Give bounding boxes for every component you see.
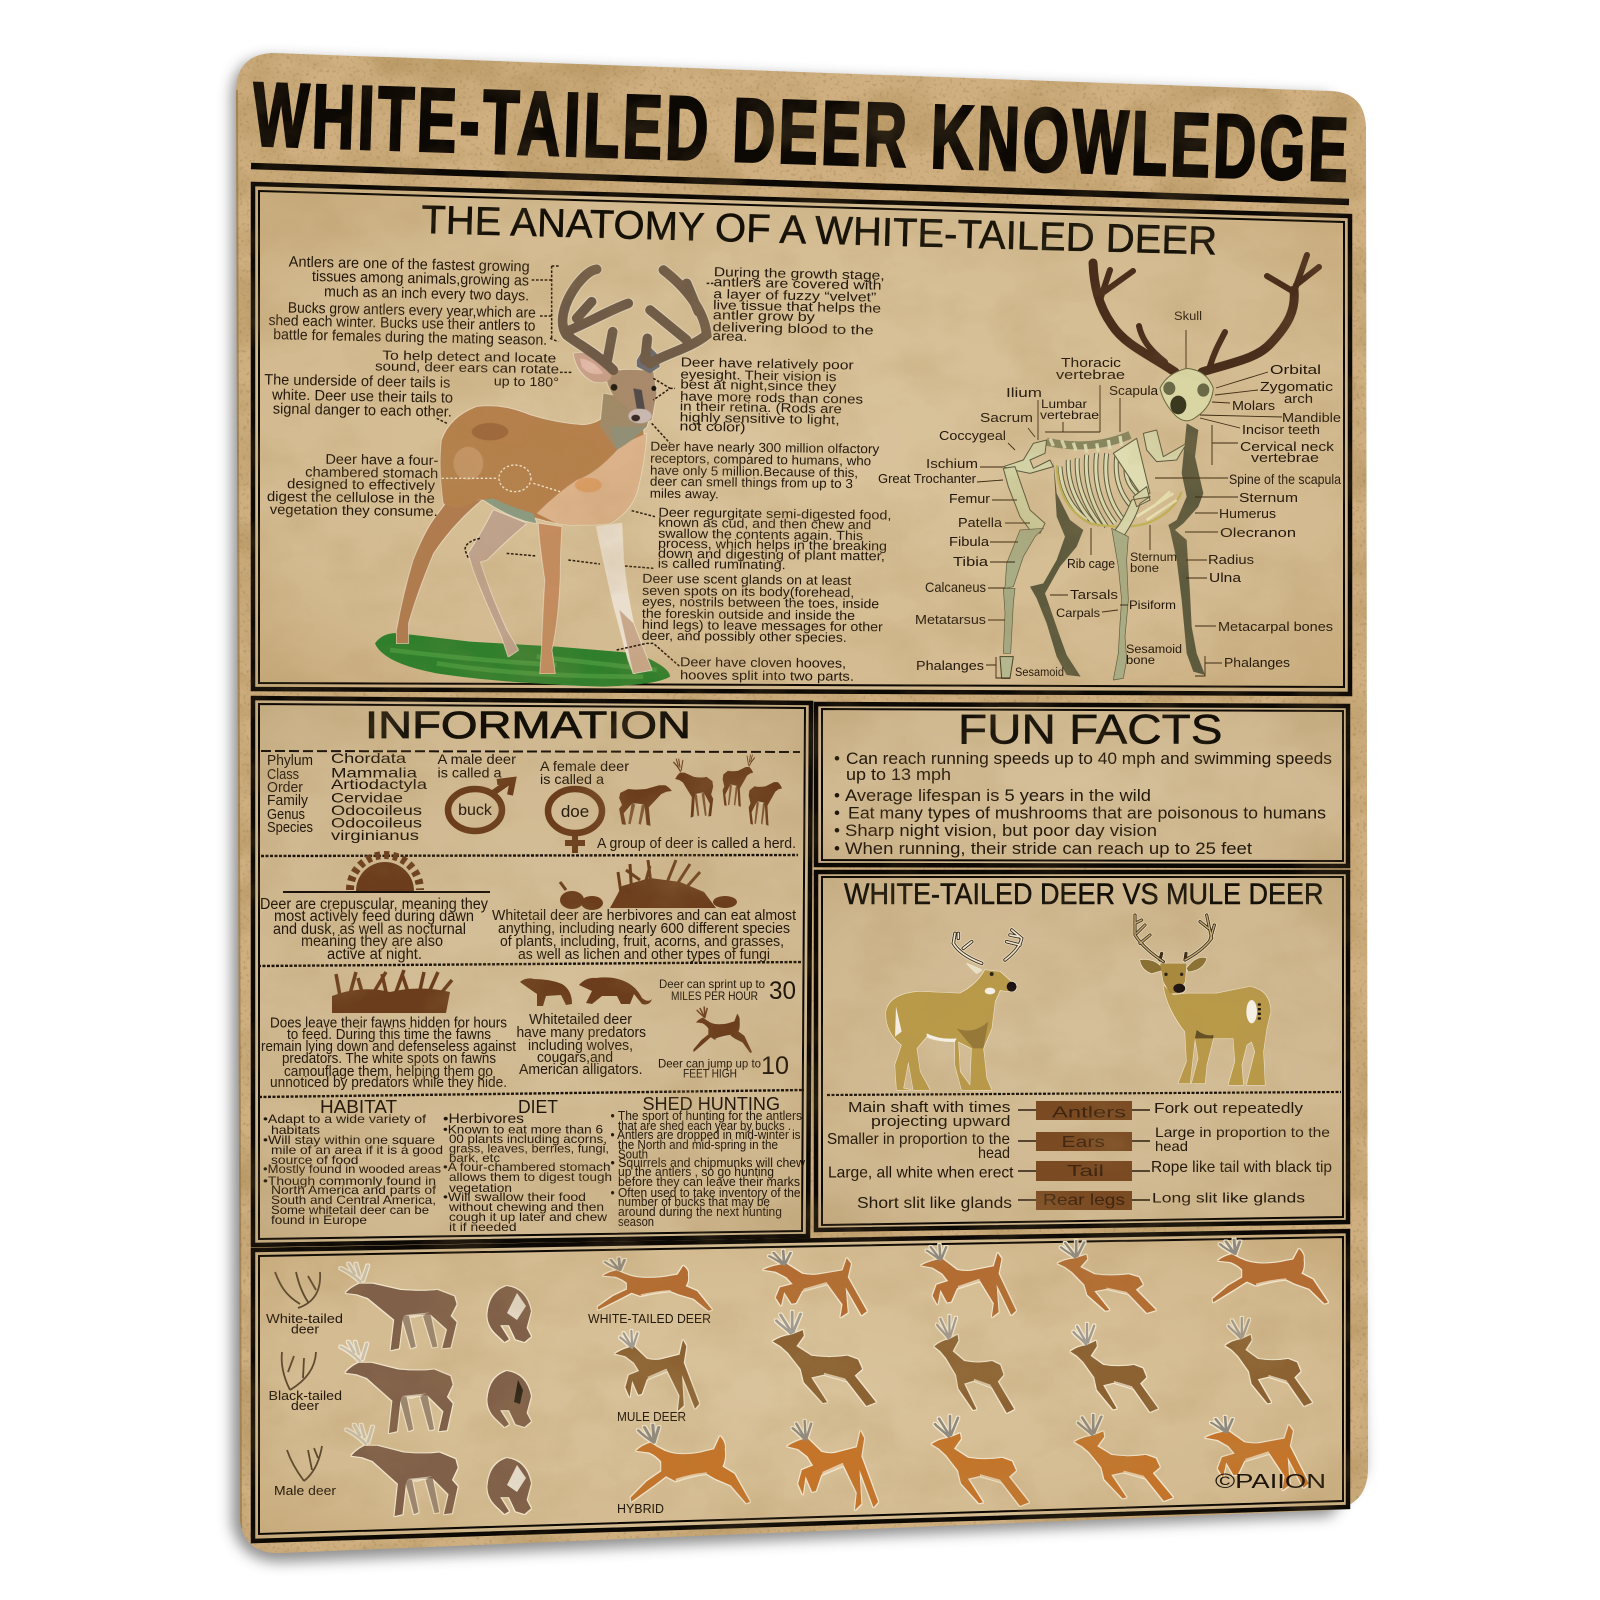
taxonomy ranks: Genus [267, 807, 305, 823]
column: habitat: mile of an area if it is a good [271, 1143, 443, 1157]
comparison: left column: Main shaft with times [848, 1099, 1010, 1116]
dividers [261, 751, 800, 752]
skeleton labels: Mandible [1282, 410, 1341, 425]
taxonomy values: Chordata [331, 750, 406, 766]
text: olfactory: receptors, compared to humans, who [650, 451, 871, 468]
text: ruminating: swallow the contents again. This [658, 526, 864, 543]
column: habitat: HABITAT [320, 1097, 397, 1117]
skeleton labels: Calcaneus [925, 579, 986, 595]
comparison: left column [827, 1099, 1014, 1212]
stat: jump height: FEET HIGH [683, 1066, 737, 1080]
fun facts list: Can reach running speeds up to 40 mph and swimming speeds [846, 749, 1332, 768]
text: scent glands: hind legs) to leave messages for other [642, 617, 884, 634]
illustration: mule deer [1135, 915, 1271, 1085]
text: ears rotate: sound, deer ears can rotate [375, 358, 559, 377]
label: white-tailed: deer [291, 1322, 320, 1336]
text: olfactory: deer can smell things from up to 3 [650, 474, 853, 491]
skeleton labels: Sacrum [980, 410, 1033, 425]
text: eyesight: have more rods than cones [680, 388, 864, 407]
text: herbivores: of plants, including, fruit, acorns, and grasses, [500, 933, 784, 950]
text: ears rotate [375, 347, 559, 390]
text: fawns: unnoticed by predators while they hide. [270, 1075, 507, 1091]
female deer [540, 758, 629, 853]
column: diet: grass, leaves, berries, fungi, [449, 1142, 609, 1156]
comparison: right column: Large in proportion to the [1155, 1124, 1330, 1140]
column: diet [443, 1097, 612, 1234]
comparison: right column: head [1155, 1138, 1188, 1154]
text: stomach: designed to effectively [287, 475, 435, 493]
leader lines: skeleton [977, 330, 1282, 678]
stat: jump height: Deer can jump up to [658, 1056, 761, 1070]
divider [827, 1092, 1341, 1095]
stat: sprint speed: MILES PER HOUR [671, 989, 758, 1003]
text: stomach: chambered stomach [305, 463, 438, 481]
skeleton labels: Ilium [1006, 385, 1042, 400]
taxonomy ranks: Order [267, 780, 303, 796]
text: tail signal [264, 371, 453, 421]
text: velvet: antler grow by [713, 307, 816, 324]
column: diet: •Will swallow their food [443, 1190, 586, 1204]
text: ruminating: known as cud, and then chew and [658, 515, 871, 532]
taxonomy ranks: Class [267, 767, 299, 783]
fun facts list: Eat many types of mushrooms that are poisonous to humans [848, 804, 1326, 822]
column: diet: •Known to eat more than 6 [443, 1122, 603, 1136]
column: habitat: source of food [271, 1153, 358, 1167]
skeleton labels: Pisiform [1129, 598, 1176, 612]
skeleton labels: vertebrae [1251, 450, 1319, 465]
skeleton labels: vertebrae [1040, 408, 1099, 422]
text: eyesight: best at night,since they [680, 376, 837, 394]
row: hybrid deer [631, 1415, 1309, 1510]
text: hooves [680, 654, 854, 684]
text: antlers fastest growing: battle for females during the mating season. [273, 326, 547, 349]
text: herbivores: Whitetail deer are herbivores and can eat almost [492, 907, 797, 924]
taxonomy ranks: Family [267, 793, 309, 809]
skeleton labels: Coccygeal [939, 428, 1006, 443]
icon: wolf and cougar [520, 977, 652, 1006]
taxonomy values: Artiodactyla [331, 776, 427, 792]
comparison: right column: Long slit like glands [1152, 1190, 1305, 1206]
text: scent glands: eyes, nostrils between the toes, inside [642, 594, 879, 611]
heading: vs: WHITE-TAILED DEER VS MULE DEER [844, 878, 1324, 911]
skeleton labels [878, 311, 1341, 679]
male deer: is called a [438, 764, 502, 780]
title rule [251, 166, 1349, 202]
text: stomach [267, 450, 439, 519]
skeleton labels: Sternum [1130, 552, 1177, 564]
text: crepuscular: Deer are crepuscular, meaning they [260, 896, 488, 913]
fun facts list: • [834, 804, 840, 822]
column: diet: DIET [518, 1097, 558, 1117]
rump column [487, 1286, 531, 1514]
column: habitat: found in Europe [271, 1213, 367, 1227]
comparison: connector lines [1018, 1110, 1150, 1200]
label: white-tailed row: WHITE-TAILED DEER [588, 1311, 711, 1326]
column: diet: •Herbivores [443, 1110, 524, 1126]
taxonomy values: Cervidae [331, 790, 403, 806]
text: olfactory [650, 439, 880, 503]
column: shed hunting: • The sport of hunting for the antlers [610, 1109, 802, 1123]
text: ears rotate: To help detect and locate [382, 347, 556, 366]
icon: sunrise [283, 855, 490, 892]
skeleton labels: Sesamoid [1015, 667, 1064, 679]
icon: plants and fruit [560, 860, 737, 910]
comparison: right column: Fork out repeatedly [1154, 1100, 1304, 1117]
text: fawns [261, 1016, 516, 1091]
skeleton labels: Orbital [1270, 362, 1321, 377]
text: ruminating [658, 505, 891, 573]
skeleton labels: arch [1284, 391, 1313, 406]
text: fawns: camouflage them, helping them go [284, 1064, 493, 1080]
text: fawns: Does leave their fawns hidden for hours [270, 1016, 507, 1032]
text: velvet: delivering blood to the [712, 319, 874, 338]
text: antlers fastest growing: tissues among animals,growing as [312, 268, 529, 289]
panel: fun facts [816, 704, 1348, 866]
column: habitat: •Adapt to a wide variety of [263, 1112, 427, 1126]
sign plate background [230, 45, 1375, 1565]
skeleton labels: Scapula [1109, 383, 1159, 398]
text: scent glands: the foreskin outside and inside the [642, 606, 855, 623]
fun facts list: • [834, 749, 840, 768]
text: olfactory: Deer have nearly 300 million olfactory [650, 439, 880, 456]
label: mule row: MULE DEER [617, 1409, 686, 1424]
column: shed hunting: that are shed each year by bucks . [618, 1119, 791, 1133]
text: velvet: live tissue that helps the [713, 297, 881, 316]
label: black-tailed: deer [291, 1398, 320, 1413]
fun facts list: When running, their stride can reach up to 25 feet [845, 839, 1252, 858]
fun facts list: up to 13 mph [846, 765, 951, 784]
skeleton labels: Femur [949, 491, 991, 506]
text: tail signal: white. Deer use their tails to [271, 386, 453, 407]
column: shed hunting: number of bucks that may be [618, 1195, 770, 1209]
label: white-tailed: White-tailed [266, 1311, 343, 1326]
text: crepuscular [260, 896, 488, 963]
text: olfactory: have only 5 million.Because of this, [650, 463, 858, 480]
column: habitat: habitats [271, 1123, 320, 1137]
skeleton labels: Skull [1174, 311, 1202, 323]
comparison: right column [1151, 1100, 1332, 1206]
text: stomach: digest the cellulose in the [267, 488, 435, 506]
text: fawns: predators. The white spots on fawns [282, 1051, 496, 1067]
text: herbivores: as well as lichen and other types of fungi [518, 946, 770, 963]
text: crepuscular: meaning they are also [301, 933, 443, 950]
text: stomach: vegetation they consume. [270, 501, 438, 519]
skeleton labels: Metatarsus [915, 612, 987, 627]
taxonomy values: virginianus [331, 827, 419, 843]
skeleton labels: Molars [1232, 398, 1276, 413]
skeleton labels: Zygomatic [1260, 379, 1334, 394]
skeleton labels: vertebrae [1056, 367, 1125, 382]
text: tail signal: signal danger to each other. [273, 400, 452, 421]
fun facts list: Average lifespan is 5 years in the wild [845, 786, 1151, 805]
herd silhouettes [619, 755, 783, 826]
watermark: ©PAIION [1215, 1471, 1326, 1493]
comparison: left column: Short slit like glands [857, 1195, 1012, 1212]
text: hooves: hooves split into two parts. [680, 667, 854, 684]
text: ruminating: down and digesting of plant matter, [658, 546, 885, 563]
skeleton labels: Phalanges [1224, 655, 1291, 670]
stat: sprint speed: Deer can sprint up to [659, 977, 765, 991]
skeleton labels: Carpals [1056, 606, 1100, 620]
skeleton labels: Ulna [1209, 570, 1242, 585]
label: white-tailed [266, 1311, 343, 1336]
column: shed hunting: • Squirrels and chipmunks will chew [610, 1156, 806, 1170]
column: habitat: •Mostly found in wooded areas [263, 1162, 441, 1176]
panel: white-tailed vs mule deer [816, 872, 1348, 1230]
column: diet: without chewing and then [448, 1200, 604, 1214]
text: predators: American alligators. [519, 1062, 642, 1078]
male deer: buck [458, 802, 493, 819]
skeleton labels: bone [1126, 655, 1155, 667]
text: antlers fastest growing: shed each winter. Bucks use their antlers to [268, 312, 536, 335]
label: male deer: Male deer [274, 1483, 337, 1498]
label: black-tailed: Black-tailed [268, 1388, 342, 1403]
skeleton labels: Olecranon [1220, 525, 1296, 540]
comparison: category boxes [1036, 1101, 1132, 1210]
illustration: photo of deer [375, 269, 707, 687]
comparison: left column: head [978, 1145, 1010, 1162]
text: predators: Whitetailed deer [529, 1012, 632, 1028]
panel: deer comparison gallery [253, 1231, 1348, 1541]
standing deer column [341, 1264, 458, 1516]
female deer: A female deer [540, 758, 629, 774]
text: scent glands [642, 571, 884, 645]
skeleton labels: Ischium [926, 456, 978, 471]
column: shed hunting: before they can leave their marks [618, 1175, 800, 1189]
taxonomy values: Odocoileus [331, 802, 422, 818]
taxonomy ranks [267, 753, 313, 836]
antler: black-tailed [282, 1352, 316, 1390]
taxonomy values: Odocoileus [331, 814, 422, 830]
sign shadow [232, 58, 1364, 1562]
column: diet: 00 plants including acorns, [449, 1132, 607, 1146]
column: habitat: •Though commonly found in [263, 1174, 436, 1188]
skeleton labels: bone [1130, 563, 1159, 575]
text: fawns: to feed. During this time the fawns [287, 1027, 491, 1043]
skeleton labels: Radius [1208, 552, 1255, 567]
text: herbivores: anything, including nearly 600 different species [498, 920, 790, 937]
text: fawns: remain lying down and defenseless against [261, 1039, 516, 1055]
row: mule deer [615, 1312, 1312, 1413]
comparison: category boxes: Antlers [1052, 1104, 1126, 1122]
fun facts list: • [834, 821, 840, 840]
skeleton labels: Tarsals [1070, 587, 1119, 602]
skeleton labels: Rib cage [1067, 556, 1115, 571]
skeleton labels: Spine of the scapula [1229, 471, 1341, 487]
male deer [438, 751, 516, 831]
column: habitat: Some whitetail deer can be [271, 1203, 429, 1217]
comparison: category boxes: Tail [1067, 1163, 1104, 1180]
fun facts list: • [834, 786, 840, 805]
column: habitat: North America and parts of [271, 1183, 437, 1197]
comparison: left column: Large, all white when erect [828, 1164, 1014, 1182]
illustration: skeleton antlers [1093, 255, 1319, 372]
column: diet: it if needed [449, 1220, 516, 1234]
skeleton labels: Phalanges [916, 658, 985, 673]
text: predators: including wolves, [528, 1038, 633, 1054]
skeleton labels: Incisor teeth [1242, 422, 1320, 437]
text: velvet: area. [712, 328, 748, 344]
skeleton labels: Thoracic [1061, 355, 1122, 370]
male deer: A male deer [438, 751, 516, 767]
column: shed hunting: SHED HUNTING [642, 1094, 780, 1114]
row: white-tailed deer [598, 1239, 1328, 1317]
column: habitat: •Will stay within one square [263, 1133, 435, 1147]
taxonomy ranks: Species [267, 820, 313, 836]
stat: sprint speed: 30 [769, 977, 796, 1005]
stat: sprint speed [659, 977, 796, 1005]
text: eyesight: eyesight. Their vision is [680, 366, 837, 384]
column: diet: vegetation [449, 1181, 512, 1195]
column: shed hunting: season [618, 1215, 654, 1229]
label: black-tailed [268, 1388, 342, 1413]
text: scent glands: Deer use scent glands on at least [642, 571, 852, 588]
text: herbivores [492, 907, 797, 963]
skeleton labels: Metacarpal bones [1218, 619, 1334, 634]
text: ruminating: process, which helps in the breaking [658, 536, 887, 553]
column: habitat: South and Central America, [271, 1193, 436, 1207]
column: shed hunting: South [618, 1148, 648, 1162]
text: eyesight [679, 354, 864, 437]
comparison: left column: Smaller in proportion to the [827, 1131, 1010, 1148]
text: crepuscular: most actively feed during dawn [274, 908, 474, 925]
text: eyesight: not color) [679, 418, 746, 435]
comparison: left column: projecting upward [871, 1113, 1010, 1130]
text: ruminating: is called ruminating. [658, 556, 786, 572]
text: ears rotate: up to 180° [494, 373, 559, 390]
text: predators: cougars,and [537, 1050, 613, 1066]
herd caption: A group of deer is called a herd. [597, 835, 796, 852]
text: stomach: Deer have a four- [325, 451, 439, 468]
text: antlers fastest growing [268, 253, 549, 349]
comparison: right column: Rope like tail with black tip [1151, 1159, 1332, 1176]
column: diet: allows them to digest tough [449, 1170, 612, 1184]
leader lines: main deer [437, 266, 713, 667]
column: shed hunting [610, 1094, 806, 1229]
skeleton labels: Lumbar [1041, 397, 1087, 411]
paper texture overlay [230, 45, 1375, 1565]
text: antlers fastest growing: much as an inch every two days. [324, 283, 529, 304]
heading: information: INFORMATION [365, 705, 691, 747]
panel: information [253, 698, 811, 1245]
text: ruminating: Deer regurgitate semi-digested food, [658, 505, 891, 522]
column: shed hunting: up the antlers , so go hunting [618, 1165, 774, 1179]
text: eyesight: Deer have relatively poor [681, 354, 855, 372]
heading: fun facts: FUN FACTS [958, 706, 1222, 752]
comparison: category boxes: Rear legs [1043, 1192, 1125, 1209]
female deer: doe [561, 802, 589, 821]
text: velvet [712, 264, 885, 347]
text: crepuscular: active at night. [327, 946, 422, 963]
taxonomy ranks: Phylum [267, 753, 313, 769]
text: predators: have many predators [516, 1025, 646, 1041]
column: shed hunting: the North and mid-spring in the [618, 1138, 778, 1152]
label: hybrid row: HYBRID [617, 1501, 664, 1516]
text: crepuscular: and dusk, as well as nocturnal [273, 921, 466, 938]
icon: tall grass [332, 970, 452, 1013]
column: habitat [263, 1097, 443, 1227]
fun facts list [834, 749, 1332, 858]
antler: male deer [287, 1446, 322, 1481]
illustration: deer skeleton [1000, 368, 1213, 680]
text: tail signal: The underside of deer tails is [264, 371, 450, 392]
stat: jump height [658, 1052, 789, 1080]
column: shed hunting: • Antlers are dropped in mid-winter is [610, 1128, 800, 1142]
skeleton labels: Tibia [953, 554, 989, 569]
skeleton labels: Sternum [1239, 490, 1298, 505]
skeleton labels: Cervical neck [1240, 439, 1335, 454]
text: antlers fastest growing: Bucks grow antlers every year,which are [288, 299, 536, 322]
text: antlers fastest growing: Antlers are one of the fastest growing [289, 253, 530, 275]
column: shed hunting: • Often used to take inventory of the [610, 1186, 801, 1200]
skeleton labels: Fibula [949, 534, 990, 549]
icon: running deer [693, 1007, 752, 1053]
fun facts list: • [834, 839, 840, 858]
text: olfactory: miles away. [650, 486, 719, 501]
heading: anatomy: THE ANATOMY OF A WHITE-TAILED DEER [421, 198, 1218, 264]
column: shed hunting: around during the next hunting [618, 1205, 782, 1219]
fun facts list: Sharp night vision, but poor day vision [845, 821, 1157, 840]
text: eyesight: in their retina. (Rods are [680, 398, 842, 416]
text: predators [516, 1012, 646, 1078]
column: diet: cough it up later and chew [449, 1210, 607, 1224]
text: velvet: During the growth stage, [714, 264, 885, 283]
taxonomy values: Mammalia [331, 764, 417, 780]
stat: jump height: 10 [761, 1052, 789, 1080]
column: diet: bark, etc [449, 1151, 500, 1165]
panel: anatomy [253, 184, 1350, 694]
antler: white-tailed [275, 1272, 320, 1308]
taxonomy values [331, 750, 427, 843]
text: velvet: a layer of fuzzy “velvet” [713, 286, 876, 305]
skeleton labels: Patella [958, 515, 1003, 530]
text: eyesight: highly sensitive to light, [680, 409, 840, 427]
skeleton labels: Great Trochanter [878, 471, 977, 486]
comparison: category boxes: Ears [1062, 1134, 1105, 1151]
illustration: white-tailed deer [886, 930, 1022, 1090]
column: diet: •A four-chambered stomach [443, 1160, 610, 1174]
female deer: is called a [540, 771, 604, 787]
skeleton labels: Humerus [1219, 506, 1277, 521]
skeleton labels: Sesamoid [1126, 644, 1182, 656]
text: scent glands: seven spots on its body(forehead, [642, 583, 854, 600]
text: scent glands: deer, and possibly other species. [642, 628, 847, 645]
text: velvet: antlers are covered with [713, 274, 882, 293]
text: hooves: Deer have cloven hooves, [680, 654, 846, 671]
